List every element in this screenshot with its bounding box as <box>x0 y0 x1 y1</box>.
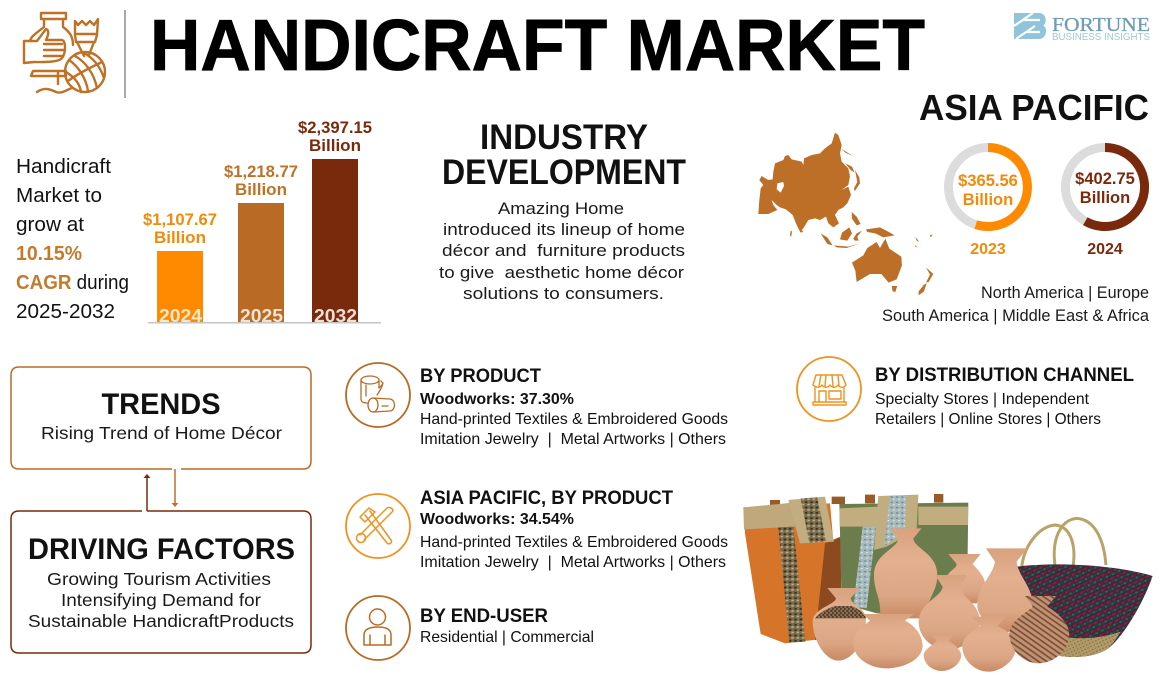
text: by end-user: BY END-USER <box>420 606 548 627</box>
text: industry development body: Amazing Home <box>498 199 624 218</box>
donut: 2023 Asia Pacific: Billion <box>963 191 1013 209</box>
text: by end-user <box>420 606 594 646</box>
logo: Fortune Business Insights: FORTUNE <box>1052 14 1150 36</box>
illustration: orange bag <box>743 497 845 643</box>
panel: driving factors: Sustainable HandicraftProducts <box>28 611 294 631</box>
logo: Fortune Business Insights <box>1014 13 1150 43</box>
panel: driving factors <box>11 511 311 653</box>
panel: driving factors: Intensifying Demand for <box>61 590 261 610</box>
text: market growth summary <box>16 156 129 323</box>
text: industry development body: introduced its lineup of home <box>443 220 685 239</box>
arrow: trends to driving factors <box>172 469 178 507</box>
panel: driving factors: Growing Tourism Activities <box>47 569 271 589</box>
text: industry development body <box>439 199 685 303</box>
illustration: pottery <box>813 528 1069 672</box>
text: market growth summary: 2025-2032 <box>16 301 115 323</box>
text: by product: Hand-printed Textiles & Embroidered Goods <box>420 411 728 428</box>
header divider <box>124 10 126 98</box>
donut: 2023 Asia Pacific <box>948 148 1028 258</box>
text: by product: BY PRODUCT <box>420 366 541 387</box>
icon: wood logs <box>346 363 410 427</box>
panel: trends: TRENDS <box>102 388 220 421</box>
panel: trends <box>11 367 311 469</box>
heading: Asia Pacific: ASIA PACIFIC <box>919 87 1149 128</box>
text: Asia Pacific by product <box>420 488 728 571</box>
text: Asia Pacific by product: Woodworks: 34.54% <box>420 511 574 528</box>
map: Asia Pacific <box>758 133 933 295</box>
donut: 2024 Asia Pacific: Billion <box>1080 189 1130 207</box>
text: by end-user: Residential | Commercial <box>420 629 594 646</box>
value label: 2032: $2,397.15 <box>298 118 372 137</box>
text: market growth summary: grow at <box>16 214 84 236</box>
icon: hammer and log <box>346 494 410 558</box>
text: other regions: South America | Middle East & Africa <box>882 307 1150 325</box>
illustration: handicraft bags and pottery <box>743 494 1153 672</box>
bar chart: market size <box>143 118 381 326</box>
logo: Fortune Business Insights: BUSINESS INSIGHTS <box>1052 32 1150 43</box>
heading: industry development: INDUSTRY <box>480 118 648 157</box>
text: Asia Pacific by product: Hand-printed Textiles & Embroidered Goods <box>420 534 728 551</box>
bar: 2025: 2025 <box>240 306 283 326</box>
text: by distribution channel: Specialty Stores | Independent <box>875 391 1090 408</box>
text: by distribution channel: Retailers | Online Stores | Others <box>875 411 1101 428</box>
text: by distribution channel: BY DISTRIBUTION CHANNEL <box>875 365 1134 386</box>
illustration: green bag <box>839 494 968 617</box>
text: market growth summary: Handicraft <box>16 156 111 178</box>
text: Asia Pacific by product: ASIA PACIFIC, BY PRODUCT <box>420 488 673 509</box>
value label: 2025: Billion <box>235 180 287 199</box>
text: by product: Imitation Jewelry | Metal Artworks | Others <box>420 431 726 448</box>
donut: 2023 Asia Pacific: 2023 <box>970 241 1006 258</box>
text: market growth summary: Market to <box>16 185 102 207</box>
icon: handicraft logo <box>24 13 105 93</box>
text: industry development body: solutions to consumers. <box>463 284 664 303</box>
donut: 2023 Asia Pacific: $365.56 <box>958 172 1018 190</box>
text: other regions <box>882 284 1150 325</box>
text: industry development body: to give aesthetic home décor <box>439 263 684 282</box>
illustration: woven basket <box>1017 518 1153 657</box>
text: by product <box>420 366 728 448</box>
heading: industry development: DEVELOPMENT <box>442 153 686 192</box>
bar: 2032: 2032 <box>314 306 357 326</box>
text: Asia Pacific by product: Imitation Jewelry | Metal Artworks | Others <box>420 554 726 571</box>
text: industry development body: décor and furniture products <box>442 241 685 260</box>
value label: 2025: $1,218.77 <box>224 162 298 181</box>
icon: end user <box>346 596 410 660</box>
donut: 2024 Asia Pacific: $402.75 <box>1075 170 1135 188</box>
bar: 2025 <box>238 203 284 326</box>
value label: 2024: Billion <box>154 228 206 247</box>
panel: driving factors: DRIVING FACTORS <box>28 533 295 566</box>
donut: 2024 Asia Pacific: 2024 <box>1087 241 1123 258</box>
text: by distribution channel <box>875 365 1134 428</box>
icon: storefront <box>797 357 861 421</box>
bar: 2024: 2024 <box>159 306 202 326</box>
value label: 2032: Billion <box>309 136 361 155</box>
arrow: driving factors to trends <box>144 474 150 511</box>
panel: trends: Rising Trend of Home Décor <box>41 423 282 443</box>
text: market growth summary: 10.15% <box>16 243 82 265</box>
bar: 2024 <box>157 251 203 326</box>
text: market growth summary: CAGR during <box>16 272 129 294</box>
title: HANDICRAFT MARKET <box>150 6 925 86</box>
donut: 2024 Asia Pacific <box>1066 147 1145 258</box>
value label: 2024: $1,107.67 <box>143 210 217 229</box>
heading: industry development <box>442 118 686 192</box>
text: by product: Woodworks: 37.30% <box>420 391 574 408</box>
text: other regions: North America | Europe <box>981 284 1149 302</box>
bar: 2032 <box>312 159 358 326</box>
